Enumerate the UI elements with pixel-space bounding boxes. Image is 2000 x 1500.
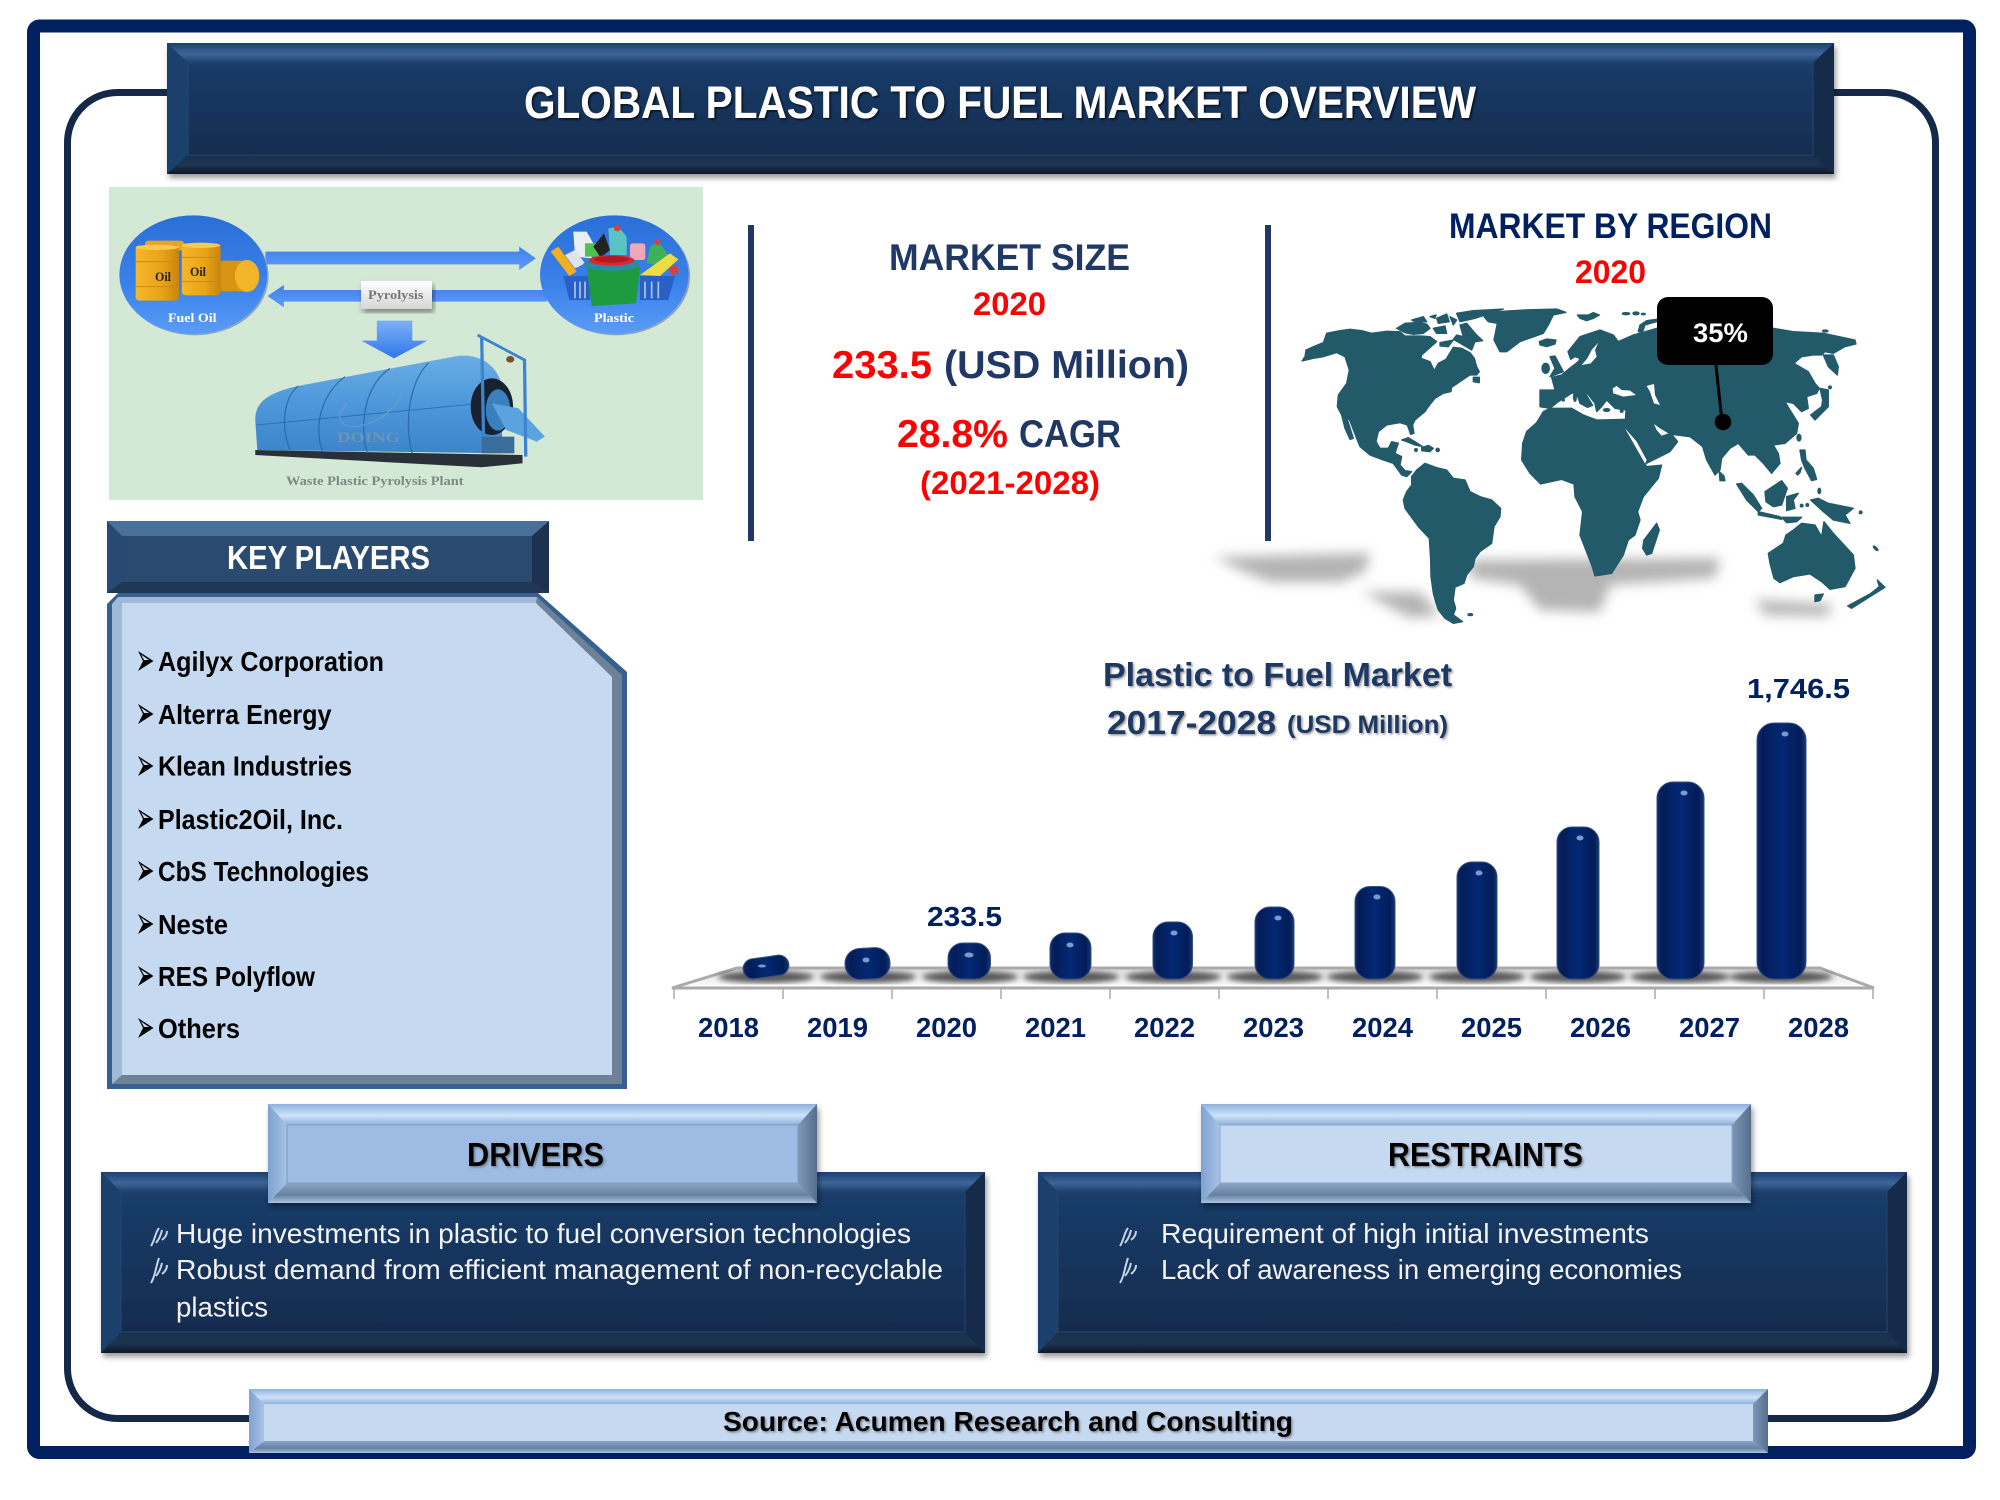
restraints header bbox=[1201, 1104, 1751, 1203]
value labels bbox=[927, 673, 1850, 932]
year axis labels: 2027 bbox=[1679, 1012, 1740, 1043]
drivers text: plastics bbox=[176, 1292, 268, 1322]
pyrolysis label: Pyrolysis bbox=[368, 287, 424, 302]
chart floor bbox=[672, 968, 1874, 999]
company list: Klean Industries bbox=[158, 750, 352, 782]
inland seas bbox=[1582, 343, 1668, 465]
fuel oil labels bbox=[155, 264, 217, 325]
CAGR period: (2021-2028) bbox=[920, 465, 1100, 501]
company list: Others bbox=[158, 1013, 240, 1044]
bar chart bbox=[672, 673, 1874, 1043]
process artwork bbox=[119, 215, 690, 335]
source text: Source: Acumen Research and Consulting bbox=[723, 1406, 1293, 1437]
market by region heading: MARKET BY REGION bbox=[1449, 207, 1772, 246]
company list: Agilyx Corporation bbox=[158, 646, 384, 677]
continents: south pacific and madagascar bbox=[1643, 450, 1885, 608]
restraints body bbox=[1038, 1172, 1907, 1353]
market size unit: (USD Million) bbox=[944, 344, 1189, 387]
chart title: (USD Million) bbox=[1287, 711, 1448, 739]
world map bbox=[1215, 309, 1885, 623]
panel: restraints bbox=[1038, 1104, 1907, 1353]
chart title: 2017-2028 bbox=[1107, 704, 1276, 741]
market size block bbox=[832, 237, 1189, 501]
source bar bbox=[249, 1389, 1768, 1453]
title banner bbox=[167, 43, 1834, 174]
year axis labels bbox=[698, 1012, 1849, 1043]
company list: RES Polyflow bbox=[158, 961, 316, 992]
fuel oil labels: Fuel Oil bbox=[168, 310, 217, 325]
map shadow bbox=[1215, 553, 1832, 618]
restraints text bbox=[1161, 1218, 1682, 1285]
pyrolysis label bbox=[361, 281, 432, 309]
bar highlights bbox=[758, 732, 1788, 968]
fuel oil labels: Oil bbox=[155, 269, 171, 284]
plastic items bbox=[551, 225, 679, 306]
drivers header bbox=[268, 1104, 817, 1203]
key players heading bbox=[107, 521, 549, 593]
company list: Plastic2Oil, Inc. bbox=[158, 804, 343, 835]
CAGR label: CAGR bbox=[1019, 413, 1121, 456]
market size year: 2020 bbox=[973, 286, 1046, 322]
divider left bbox=[748, 225, 754, 541]
plastic label: Plastic bbox=[594, 310, 634, 325]
restraints text: Requirement of high initial investments bbox=[1161, 1218, 1649, 1249]
continents: eurasia and africa bbox=[1522, 312, 1856, 576]
year axis labels: 2024 bbox=[1352, 1012, 1414, 1043]
callout value: 35% bbox=[1693, 318, 1748, 348]
value labels: 1,746.5 bbox=[1747, 673, 1850, 704]
year axis labels: 2021 bbox=[1025, 1012, 1086, 1043]
CAGR value: 28.8% bbox=[897, 413, 1008, 456]
company list: Neste bbox=[158, 909, 228, 940]
panel: drivers bbox=[101, 1104, 985, 1353]
callout: 35% bbox=[1657, 297, 1773, 430]
plant caption: Waste Plastic Pyrolysis Plant bbox=[286, 473, 464, 488]
divider right bbox=[1265, 225, 1271, 541]
drivers text: Huge investments in plastic to fuel conversion technologies bbox=[176, 1218, 911, 1249]
year axis labels: 2018 bbox=[698, 1012, 759, 1043]
key players label: KEY PLAYERS bbox=[227, 539, 430, 576]
chart title: Plastic to Fuel Market bbox=[1103, 656, 1452, 693]
year axis labels: 2020 bbox=[916, 1012, 977, 1043]
list arrow markers bbox=[138, 651, 154, 1038]
plant watermark: DOING bbox=[337, 430, 400, 446]
pyrolysis plant bbox=[255, 321, 545, 467]
drivers body bbox=[101, 1172, 985, 1353]
year axis labels: 2022 bbox=[1134, 1012, 1195, 1043]
year axis labels: 2028 bbox=[1788, 1012, 1849, 1043]
year axis labels: 2026 bbox=[1570, 1012, 1631, 1043]
market size heading: MARKET SIZE bbox=[889, 237, 1130, 278]
chart title bbox=[1103, 656, 1452, 741]
continents: americas and north atlantic bbox=[1302, 309, 1566, 623]
company list bbox=[158, 646, 384, 1044]
fuel oil labels: Oil bbox=[190, 264, 206, 279]
drivers text: Robust demand from efficient management of non-recyclable bbox=[176, 1254, 943, 1285]
restraints label: RESTRAINTS bbox=[1388, 1136, 1583, 1173]
pyrolysis process image bbox=[109, 187, 703, 500]
market size value: 233.5 bbox=[832, 344, 932, 387]
restraints bullets bbox=[1120, 1228, 1136, 1283]
market by region year: 2020 bbox=[1575, 254, 1646, 290]
value labels: 233.5 bbox=[927, 901, 1002, 932]
drivers text bbox=[176, 1218, 943, 1322]
title text: GLOBAL PLASTIC TO FUEL MARKET OVERVIEW bbox=[524, 77, 1476, 128]
drivers label: DRIVERS bbox=[467, 1136, 604, 1173]
bars bbox=[742, 723, 1806, 980]
year axis labels: 2025 bbox=[1461, 1012, 1522, 1043]
year axis labels: 2019 bbox=[807, 1012, 868, 1043]
company list: Alterra Energy bbox=[158, 699, 332, 730]
company list: CbS Technologies bbox=[158, 856, 369, 887]
bar shadows bbox=[718, 971, 1833, 983]
drivers bullets bbox=[151, 1228, 167, 1283]
year axis labels: 2023 bbox=[1243, 1012, 1304, 1043]
restraints text: Lack of awareness in emerging economies bbox=[1161, 1254, 1682, 1285]
key players panel bbox=[107, 593, 627, 1089]
